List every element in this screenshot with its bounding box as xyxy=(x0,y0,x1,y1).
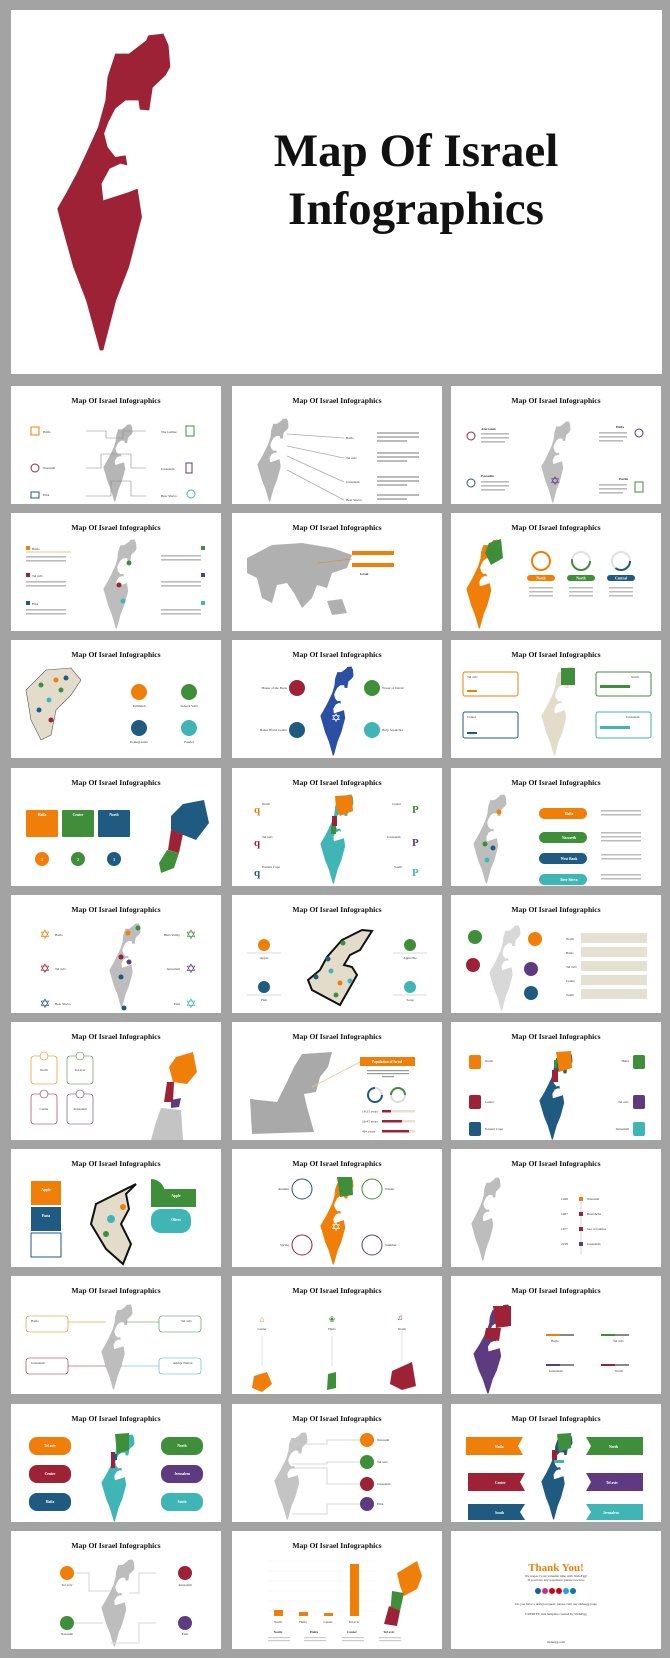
slide r3c2: blue map with landmark icons: Map Of Israel Infographics xyxy=(292,650,382,659)
slide r7c1: beige map with panels: Olives xyxy=(171,1218,181,1222)
slide r6c3: blue map with numbered squares: Map Of Israel Infographics xyxy=(511,1032,601,1041)
slide r7c1: beige map with panels: Apple xyxy=(171,1194,181,1198)
hero map of Israel xyxy=(57,34,170,350)
slide r7c3: gray map with timeline: 2018 xyxy=(561,1242,568,1246)
slide r9c3: ribbons around blue map: North xyxy=(609,1445,618,1449)
slide r3c3: beige map with colored callout boxes: Map Of Israel Infographics xyxy=(511,650,601,659)
slide r8c3: purple map with bars: Map Of Israel Infographics xyxy=(511,1286,601,1295)
slide r5c1: stars and map: Eilat xyxy=(174,1002,180,1006)
slide r2c3: colored map with rings: North xyxy=(576,576,586,580)
slide r3c2: blue map with landmark icons: House of the Book xyxy=(261,686,287,690)
slide r8c1: gray map with outlined boxes: Tel aviv xyxy=(181,1319,192,1323)
slide r8c3: purple map with bars: North xyxy=(615,1369,623,1373)
slide r5c1: stars and map: ✡ xyxy=(40,961,50,976)
slide r9c1: pills around colored map: Jerusalem xyxy=(174,1472,190,1476)
slide r3c3: beige map with colored callout boxes: Center xyxy=(467,715,477,719)
slide r3c3: beige map with colored callout boxes: Jerusalem xyxy=(626,715,640,719)
slide r6c3: blue map with numbered squares: Center xyxy=(485,1100,495,1104)
slide r5c3: map with icons and text boxes: South xyxy=(566,993,574,997)
slide r2c3: colored map with rings: North xyxy=(536,576,546,580)
slide r5c2: beige map with dots and icons: Apple xyxy=(260,956,269,960)
slide r10c2: bar chart with map xyxy=(232,1531,442,1649)
slide r7c3: gray map with timeline: Map Of Israel Infographics xyxy=(511,1159,601,1168)
slide r8c2: three small maps: ⌂ xyxy=(260,1315,265,1324)
slide r3c1: beige map with dots and circles: Yelimdeh xyxy=(132,704,146,708)
slide r8c1: gray map with outlined boxes xyxy=(11,1276,221,1394)
slide r7c1: beige map with panels xyxy=(11,1149,221,1267)
slide r1c1: icons with labels: Jerusalem xyxy=(161,467,175,471)
slide r5c1: stars and map xyxy=(11,895,221,1013)
slide r9c1: pills around colored map: Tel aviv xyxy=(44,1444,56,1448)
slide r5c1: stars and map: ✡ xyxy=(40,996,50,1011)
slide r4c2: colored map with labels: P xyxy=(412,804,419,816)
slide r1c2: map with leader lines: Haifa xyxy=(346,436,354,440)
slide r3c1: beige map with dots and circles xyxy=(11,640,221,758)
slide r1c2: map with leader lines xyxy=(232,386,442,504)
slide r8c1: gray map with outlined boxes: Ahrige Nation xyxy=(173,1361,193,1365)
slide r6c2: population panel: Population of Israel xyxy=(372,1060,402,1064)
slide r8c1: gray map with outlined boxes: Map Of Israel Infographics xyxy=(71,1286,161,1295)
slide r5c1: stars and map: ✡ xyxy=(40,927,50,942)
slide r5c2: beige map with dots and icons: Fish xyxy=(261,998,267,1002)
slide r1c1: icons with labels: The Galilee xyxy=(161,430,177,434)
slide r3c3: beige map with colored callout boxes: Tel aviv xyxy=(467,675,478,679)
slide r4c3: gray map with pills xyxy=(451,768,661,886)
slide r2c3: colored map with rings xyxy=(451,513,661,631)
slide r8c2: three small maps: Map Of Israel Infographics xyxy=(292,1286,382,1295)
slide r4c1: three boxes with numbers: Center xyxy=(73,813,84,817)
slide r6c1: outlined boxes with orange map: Center xyxy=(39,1107,49,1111)
slide r6c3: blue map with numbered squares: Jerusalem xyxy=(615,1127,629,1131)
slide r10c1: gray map with four icons: Nazareth xyxy=(61,1632,73,1636)
slide r4c2: colored map with labels: Eastern Cape xyxy=(262,865,280,869)
slide r10c3: thank you: CREDITS: this template created by SlideEgg xyxy=(525,1612,587,1616)
slide r6c3: blue map with numbered squares xyxy=(451,1022,661,1140)
slide r10c1: gray map with four icons: Map Of Israel Infographics xyxy=(71,1541,161,1550)
hero title: Map Of Israel xyxy=(274,125,558,177)
slide r7c2: orange map with four circles xyxy=(232,1149,442,1267)
slide r2c1: gray map with colored labels: Eilat xyxy=(32,602,38,606)
slide r10c2: bar chart with map: Haifa xyxy=(299,1620,307,1624)
slide r7c3: gray map with timeline: 1977 xyxy=(561,1227,568,1231)
slide r4c2: colored map with labels: P xyxy=(412,867,419,879)
slide r1c1: icons with labels: Eilat xyxy=(43,493,49,497)
slide r2c2: world map with Israel highlight: ✡ xyxy=(370,557,376,565)
slide r7c3: gray map with timeline: Sea of Galilee xyxy=(587,1227,607,1231)
slide r6c2: population panel: 18-25 years xyxy=(362,1110,379,1114)
slide r9c1: pills around colored map: Center xyxy=(45,1472,56,1476)
slide r5c3: map with icons and text boxes: Tel aviv xyxy=(566,965,577,969)
slide r9c1: pills around colored map: South xyxy=(178,1500,186,1504)
slide r4c2: colored map with labels: q xyxy=(254,804,261,816)
slide r7c2: orange map with four circles: Winter xyxy=(385,1187,395,1191)
slide r10c2: bar chart with map: Center xyxy=(347,1630,357,1634)
slide r4c3: gray map with pills: Beer Sheva xyxy=(560,878,578,882)
slide r7c2: orange map with four circles: Autumn xyxy=(278,1187,289,1191)
slide r2c1: gray map with colored labels: Haifa xyxy=(32,547,40,551)
slide r4c2: colored map with labels: q xyxy=(254,867,261,879)
slide r3c2: blue map with landmark icons: Tower of David xyxy=(382,686,404,690)
slide r7c3: gray map with timeline: 1967 xyxy=(561,1212,568,1216)
slide r5c3: map with icons and text boxes: Center xyxy=(566,979,576,983)
slide r10c3: thank you xyxy=(451,1531,661,1649)
slide r1c3: map with star and four icons: Aferrands xyxy=(481,427,497,431)
slide r10c3: thank you: Do you have a design request, please visit our slideegg page xyxy=(515,1602,597,1607)
slide r5c3: map with icons and text boxes: Haifa xyxy=(566,951,574,955)
slide r7c3: gray map with timeline: Beersheba xyxy=(587,1212,602,1216)
slide r6c2: population panel: 46+ years xyxy=(362,1130,376,1134)
slide r7c1: beige map with panels: Map Of Israel Infographics xyxy=(71,1159,161,1168)
slide r4c1: three boxes with numbers: Haifa xyxy=(38,813,46,817)
slide r8c2: three small maps: Haifa xyxy=(328,1327,336,1331)
slide r8c2: three small maps: ❀ xyxy=(329,1315,336,1324)
slide r6c2: population panel: 26-45 years xyxy=(362,1120,379,1124)
slide r1c1: icons with labels xyxy=(11,386,221,504)
slide r1c3: map with star and four icons: Passadin xyxy=(481,474,494,478)
slide r1c2: map with leader lines: Tel aviv xyxy=(346,456,357,460)
slide r10c3: thank you: slideegg.com xyxy=(547,1640,565,1644)
slide r2c2: world map with Israel highlight xyxy=(232,513,442,631)
hero title: Infographics xyxy=(288,183,544,235)
slide r9c3: ribbons around blue map: South xyxy=(495,1511,504,1515)
slide r9c3: ribbons around blue map xyxy=(451,1404,661,1522)
slide r1c2: map with leader lines: Beer Sheva xyxy=(346,498,362,502)
slide r5c2: beige map with dots and icons xyxy=(232,895,442,1013)
slide r9c2: gray map with percentage circles: Eilat xyxy=(377,1502,383,1506)
slide r7c2: orange map with four circles: Spring xyxy=(280,1243,289,1247)
slide r5c1: stars and map: Map Of Israel Infographics xyxy=(71,905,161,914)
slide r6c2: population panel: Map Of Israel Infographics xyxy=(292,1032,382,1041)
slide r10c1: gray map with four icons: Tel aviv xyxy=(62,1583,73,1587)
slide r3c2: blue map with landmark icons: Holy Sepulchre xyxy=(382,728,404,732)
slide r10c1: gray map with four icons: Eilat xyxy=(182,1632,188,1636)
slide r9c3: ribbons around blue map: Map Of Israel Infographics xyxy=(511,1414,601,1423)
slide r10c2: bar chart with map: Center xyxy=(323,1620,333,1624)
slide r9c3: ribbons around blue map: Center xyxy=(495,1481,506,1485)
slide r9c3: ribbons around blue map: Tel aviv xyxy=(606,1481,618,1485)
slide r4c1: three boxes with numbers xyxy=(11,768,221,886)
slide r10c1: gray map with four icons: Jerusalem xyxy=(178,1583,192,1587)
slide r5c1: stars and map: ✡ xyxy=(186,927,196,942)
hero slide xyxy=(11,10,662,374)
slide r1c3: map with star and four icons: Purim xyxy=(619,477,628,481)
slide r4c2: colored map with labels: Tel aviv xyxy=(262,835,273,839)
slide r4c3: gray map with pills: Map Of Israel Infographics xyxy=(511,778,601,787)
slide r7c3: gray map with timeline: 1948 xyxy=(561,1197,568,1201)
slide r7c3: gray map with timeline: Nazareth xyxy=(587,1197,600,1201)
slide r2c3: colored map with rings: Map Of Israel Infographics xyxy=(511,523,601,532)
slide r8c3: purple map with bars: Jerusalem xyxy=(549,1369,563,1373)
slide r9c1: pills around colored map: North xyxy=(177,1444,187,1448)
slide r3c1: beige map with dots and circles: Falafel xyxy=(184,740,194,744)
slide r9c1: pills around colored map: Map Of Israel Infographics xyxy=(71,1414,161,1423)
slide r4c2: colored map with labels: North xyxy=(262,802,270,806)
slide r6c1: outlined boxes with orange map: Tel aviv xyxy=(75,1068,86,1072)
slide r7c2: orange map with four circles: Summer xyxy=(385,1243,397,1247)
slide r6c1: outlined boxes with orange map: Map Of Israel Infographics xyxy=(71,1032,161,1041)
slide r10c3: thank you: We respect your valuable time with SlideEgg! xyxy=(525,1574,587,1578)
slide r5c1: stars and map: Haifa xyxy=(55,933,63,937)
slide r5c1: stars and map: Jerusalem xyxy=(166,967,180,971)
slide r8c2: three small maps: Center xyxy=(257,1327,267,1331)
slide r8c1: gray map with outlined boxes: Jerusalem xyxy=(31,1361,45,1365)
slide r9c3: ribbons around blue map: Haifa xyxy=(495,1445,504,1449)
slide r9c3: ribbons around blue map: Jerusalem xyxy=(603,1511,619,1515)
slide r5c1: stars and map: ✡ xyxy=(186,996,196,1011)
slide r4c1: three boxes with numbers: North xyxy=(109,813,119,817)
slide r8c3: purple map with bars xyxy=(451,1276,661,1394)
slide r4c3: gray map with pills: Haifa xyxy=(565,812,573,816)
slide r2c2: world map with Israel highlight: Map Of Israel Infographics xyxy=(292,523,382,532)
slide r6c3: blue map with numbered squares: Eastern Cape xyxy=(485,1127,503,1131)
slide r1c1: icons with labels: Nazareth xyxy=(43,466,56,470)
slide r1c3: map with star and four icons: Map Of Israel Infographics xyxy=(511,396,601,405)
slide r3c3: beige map with colored callout boxes: North xyxy=(631,675,639,679)
slide r5c3: map with icons and text boxes: Map Of Israel Infographics xyxy=(511,905,601,914)
slide r3c1: beige map with dots and circles: Pomegranate xyxy=(130,740,148,744)
slide r3c2: blue map with landmark icons: Bahai World Center xyxy=(260,728,288,732)
slide r3c1: beige map with dots and circles: Map Of Israel Infographics xyxy=(71,650,161,659)
slide r10c3: thank you: Thank You! xyxy=(528,1562,584,1574)
slide r5c3: map with icons and text boxes: North xyxy=(566,937,574,941)
slide r2c3: colored map with rings: Central xyxy=(615,576,627,580)
slide r1c1: icons with labels: Haifa xyxy=(43,430,51,434)
slide r8c3: purple map with bars: Tel aviv xyxy=(613,1339,624,1343)
slide r5c3: map with icons and text boxes xyxy=(451,895,661,1013)
slide r4c3: gray map with pills: Nazareth xyxy=(562,836,576,840)
slide r4c2: colored map with labels xyxy=(232,768,442,886)
slide r1c1: icons with labels: Beer Sheva xyxy=(161,494,177,498)
slide r5c2: beige map with dots and icons: Map Of Israel Infographics xyxy=(292,905,382,914)
slide r9c2: gray map with percentage circles: Nazareth xyxy=(377,1438,390,1442)
slide r3c2: blue map with landmark icons xyxy=(232,640,442,758)
slide r6c3: blue map with numbered squares: Tel aviv xyxy=(618,1100,629,1104)
slide r7c2: orange map with four circles: ✡ xyxy=(331,1220,341,1234)
slide r1c1: icons with labels: Map Of Israel Infographics xyxy=(71,396,161,405)
slide r3c3: beige map with colored callout boxes xyxy=(451,640,661,758)
slide r8c3: purple map with bars: Haifa xyxy=(551,1339,559,1343)
slide r10c2: bar chart with map: Haifa xyxy=(310,1630,318,1634)
slide r5c2: beige map with dots and icons: Soup xyxy=(407,998,414,1002)
slide r4c1: three boxes with numbers: 3 xyxy=(113,858,115,862)
slide r7c3: gray map with timeline: Jerusalem xyxy=(587,1242,601,1246)
slide r10c2: bar chart with map: North xyxy=(274,1620,282,1624)
slide r6c1: outlined boxes with orange map xyxy=(11,1022,221,1140)
slide r9c2: gray map with percentage circles xyxy=(232,1404,442,1522)
slide r6c1: outlined boxes with orange map: North xyxy=(40,1068,48,1072)
hero title xyxy=(274,125,558,235)
slide r3c1: beige map with dots and circles: Sabach Safti xyxy=(180,704,198,708)
slide r10c2: bar chart with map: North xyxy=(274,1630,282,1634)
slide r7c1: beige map with panels: Pasta xyxy=(42,1214,50,1218)
slide r2c1: gray map with colored labels xyxy=(11,513,221,631)
slide r4c2: colored map with labels: Jerusalem xyxy=(387,835,401,839)
slide r5c2: beige map with dots and icons: Apple Pie xyxy=(403,956,417,960)
slide r5c1: stars and map: Hula Valley xyxy=(164,933,180,937)
slide r2c1: gray map with colored labels: Map Of Israel Infographics xyxy=(71,523,161,532)
slide r6c1: outlined boxes with orange map: Jerusalem xyxy=(73,1107,87,1111)
slide r7c2: orange map with four circles: Map Of Israel Infographics xyxy=(292,1159,382,1168)
slide r4c2: colored map with labels: q xyxy=(254,837,261,849)
slide r4c2: colored map with labels: Center xyxy=(392,802,402,806)
slide r4c1: three boxes with numbers: 2 xyxy=(77,858,79,862)
slide r2c1: gray map with colored labels: Tel aviv xyxy=(32,574,43,578)
slide r4c2: colored map with labels: South xyxy=(394,865,402,869)
slide r10c2: bar chart with map: Map Of Israel Infographics xyxy=(292,1541,382,1550)
slide r6c3: blue map with numbered squares: North xyxy=(485,1059,493,1063)
slide r9c1: pills around colored map: Haifa xyxy=(46,1500,54,1504)
slide r6c2: population panel xyxy=(232,1022,442,1140)
slide r9c1: pills around colored map xyxy=(11,1404,221,1522)
slide r8c2: three small maps: North xyxy=(398,1327,406,1331)
slide r5c1: stars and map: Beer Sheva xyxy=(55,1002,71,1006)
slide r9c2: gray map with percentage circles: Tel aviv xyxy=(377,1460,388,1464)
slide r5c1: stars and map: Tel aviv xyxy=(55,967,66,971)
slide r4c1: three boxes with numbers: 1 xyxy=(41,858,43,862)
slide r10c3: thank you: If you have any questions, please reach us xyxy=(527,1578,585,1583)
slide r4c2: colored map with labels: P xyxy=(412,837,419,849)
slide r3c2: blue map with landmark icons: ✡ xyxy=(331,711,341,725)
slide r7c3: gray map with timeline xyxy=(451,1149,661,1267)
slide r1c2: map with leader lines: Jerusalem xyxy=(346,480,360,484)
slide r10c1: gray map with four icons xyxy=(11,1531,221,1649)
slide r2c2: world map with Israel highlight: Israel xyxy=(360,572,368,576)
slide r4c1: three boxes with numbers: Map Of Israel Infographics xyxy=(71,778,161,787)
slide r1c2: map with leader lines: Map Of Israel Infographics xyxy=(292,396,382,405)
slide r8c1: gray map with outlined boxes: Haifa xyxy=(31,1319,39,1323)
slide r1c3: map with star and four icons: Haifa xyxy=(616,425,624,429)
slide r8c2: three small maps: ♫ xyxy=(397,1313,403,1322)
slide r4c3: gray map with pills: West Bank xyxy=(561,857,577,861)
slide r9c2: gray map with percentage circles: Jerusalem xyxy=(377,1482,391,1486)
slide r1c3: map with star and four icons: ✡ xyxy=(550,474,560,488)
slide r10c2: bar chart with map: Tel aviv xyxy=(383,1630,395,1634)
slide r5c1: stars and map: ✡ xyxy=(186,961,196,976)
slide r1c3: map with star and four icons xyxy=(451,386,661,504)
slide r4c2: colored map with labels: Map Of Israel Infographics xyxy=(292,778,382,787)
slide r8c2: three small maps xyxy=(232,1276,442,1394)
slide r10c2: bar chart with map: Tel aviv xyxy=(349,1620,360,1624)
slide r7c1: beige map with panels: Apple xyxy=(41,1188,51,1192)
slide r9c2: gray map with percentage circles: Map Of Israel Infographics xyxy=(292,1414,382,1423)
slide r6c3: blue map with numbered squares: Haifa xyxy=(621,1059,629,1063)
